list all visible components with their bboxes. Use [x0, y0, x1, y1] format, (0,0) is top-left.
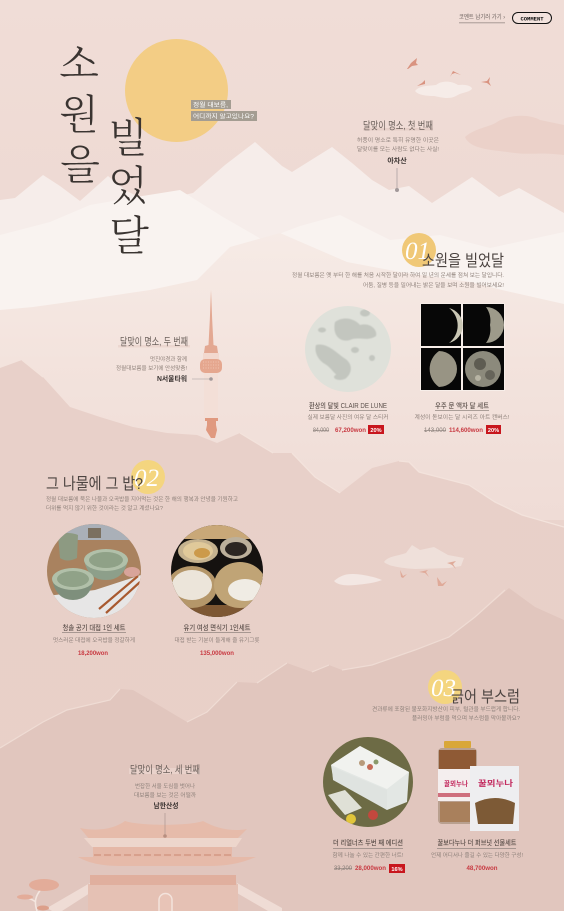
section 02 heading: 그 나물에 그 밥? [46, 475, 143, 493]
pink cloud bank [465, 116, 564, 155]
section 02 heading: 정월 대보름에 묵은 나물과 오곡밥을 지어먹는 것은 한 해의 행복과 안녕을 기원하고 [46, 495, 238, 503]
spot three text: 대보름을 보는 것은 어떨까 [134, 791, 196, 799]
product: brass bowl set: 135,000won [200, 650, 234, 657]
spot one text [357, 120, 439, 192]
icon: Namhansanseong gate [47, 813, 282, 911]
section 02 heading [46, 460, 238, 512]
subtitle labels: 어디까지 알고있나요? [193, 112, 255, 120]
near pale mountains [0, 190, 564, 320]
product: nut jar and pouch: 48,700won [466, 865, 498, 872]
distant white mountains [0, 142, 564, 320]
product: nut tin: 16% [391, 867, 403, 873]
ridge highlight [22, 360, 564, 527]
section 01 heading [292, 233, 504, 289]
product: nut tin: 더 리얼너츠 두번 째 에디션 [333, 838, 403, 847]
title: 빌 [108, 105, 148, 164]
product: moon sticker: 20% [370, 428, 382, 434]
subtitle labels: 정월 대보름, [193, 101, 228, 109]
product: brass bowl set [167, 525, 266, 657]
pale pink ridge [0, 233, 564, 520]
product: nut jar and pouch: 언제 어디서나 즐길 수 있는 다양한 구성! [431, 851, 523, 859]
product: moon phase frames: 143,000 [424, 428, 447, 434]
spot three text: 남한산성 [154, 801, 178, 810]
section 03 heading [372, 670, 520, 722]
title: 을 [60, 132, 100, 191]
product: moon sticker: 실제 보름달 사진의 여유 달 스티커 [308, 413, 388, 421]
title: 소 [59, 31, 99, 90]
title [59, 31, 149, 262]
product: nut jar and pouch [431, 741, 523, 872]
spot two text: 정월대보름을 보기에 안성맞춤! [116, 364, 187, 372]
section 03 heading: 플러밍아 부럼을 먹으며 부스럼을 막아볼까요? [412, 714, 520, 722]
spot one text: 달맞이 명소, 첫 번째 [363, 120, 433, 132]
product: moon phase frames [414, 303, 510, 434]
product: nut jar and pouch: 꿀뫼누나 [444, 779, 469, 788]
spot two text: 달맞이 명소, 두 번째 [120, 336, 188, 348]
spot two text: N서울타워 [157, 374, 187, 383]
section 03 heading: 긁어 부스럼 [451, 688, 520, 706]
spot two text [116, 336, 213, 383]
section 01 heading: 어둠, 질병 등을 밀어내는 밝은 달을 보며 소원을 빌어보세요! [363, 281, 504, 289]
spot one text: 달맞이를 모는 사람도 없다는 사실! [357, 145, 439, 153]
icon: N Seoul Tower [200, 290, 222, 438]
lower clouds and birds [334, 545, 464, 586]
spot three text: 번잡한 서울 도심을 벗어나 [135, 782, 195, 790]
section 03 heading: 견과류에 포함된 불포화지방산이 피부, 털관을 부드럽게 합니다. [372, 705, 520, 713]
front dusk ridge [0, 588, 564, 911]
product: nut tin: 함께 나눌 수 있는 간편한 너트! [332, 851, 404, 859]
product: moon phase frames: 20% [488, 428, 499, 434]
title: 원 [59, 82, 99, 141]
product: celadon bowl set [47, 524, 141, 657]
product: brass bowl set: 유기 여성 면식기 1인세트 [184, 623, 251, 632]
product: moon sticker: 84,000 [313, 428, 330, 434]
product: nut jar and pouch: 꿀보다누나 더 퍼브넛 선물세트 [438, 838, 517, 847]
product: nut tin [323, 737, 413, 873]
section 02 heading: 02 [134, 465, 159, 492]
front ridge highlight [0, 590, 505, 748]
section 01 heading: 소원을 빌었달 [422, 252, 504, 270]
spot one text: 아차산 [387, 156, 407, 165]
product: celadon bowl set: 청솔 공기 대접 1인 세트 [62, 623, 126, 632]
product: nut tin: 28,000won [355, 865, 386, 872]
section 01 heading: 정월 대보름은 옛 부터 한 해를 처음 시작한 달이라 하여 일 년의 운세를 점쳐 보는 달입니다. [292, 271, 504, 279]
product: moon sticker [305, 306, 391, 434]
spot one text: 허풍이 명소로 특히 유명한 이곳은 [357, 136, 439, 144]
title: 달 [109, 203, 149, 262]
section 01 heading: 01 [405, 238, 430, 265]
product: moon phase frames: 계성이 돋보이는 달 시리즈 아트 캔버스! [414, 413, 510, 421]
section 02 heading: 더위를 먹지 않기 위한 것이라는 것 알고 계셨나요? [46, 504, 163, 512]
comment link: COMMENT [520, 15, 544, 22]
product: moon phase frames: 우주 문 액자 달 세트 [435, 401, 489, 410]
product: celadon bowl set: 멋스러운 대접에 오곡밥을 정갈하게 [53, 636, 135, 644]
top clouds and birds [407, 58, 491, 98]
product: moon sticker: 환상의 달빛 CLAIR DE LUNE [309, 401, 387, 410]
moon disc [125, 39, 228, 142]
product: celadon bowl set: 18,200won [78, 650, 108, 657]
spot three text [129, 764, 200, 810]
title: 었 [108, 153, 148, 212]
subtitle labels [191, 100, 257, 121]
product: nut jar and pouch: 꿀뫼누나 [478, 778, 514, 788]
spot three text: 달맞이 명소, 세 번째 [130, 764, 200, 776]
comment link: 코멘트 남기러 가기 › [459, 13, 505, 21]
icon: pine tree [17, 879, 59, 911]
product: nut tin: 33,200 [334, 866, 353, 872]
spot two text: 멋진야경과 함께 [150, 355, 187, 363]
product: moon phase frames: 114,600won [449, 427, 483, 434]
product: moon sticker: 67,200won [335, 427, 366, 434]
comment link [459, 12, 552, 24]
middle rose ridge [0, 360, 564, 911]
section 03 heading: 03 [431, 675, 456, 702]
product: brass bowl set: 대접 받는 기분이 들게해 줄 유기그릇 [174, 636, 260, 644]
